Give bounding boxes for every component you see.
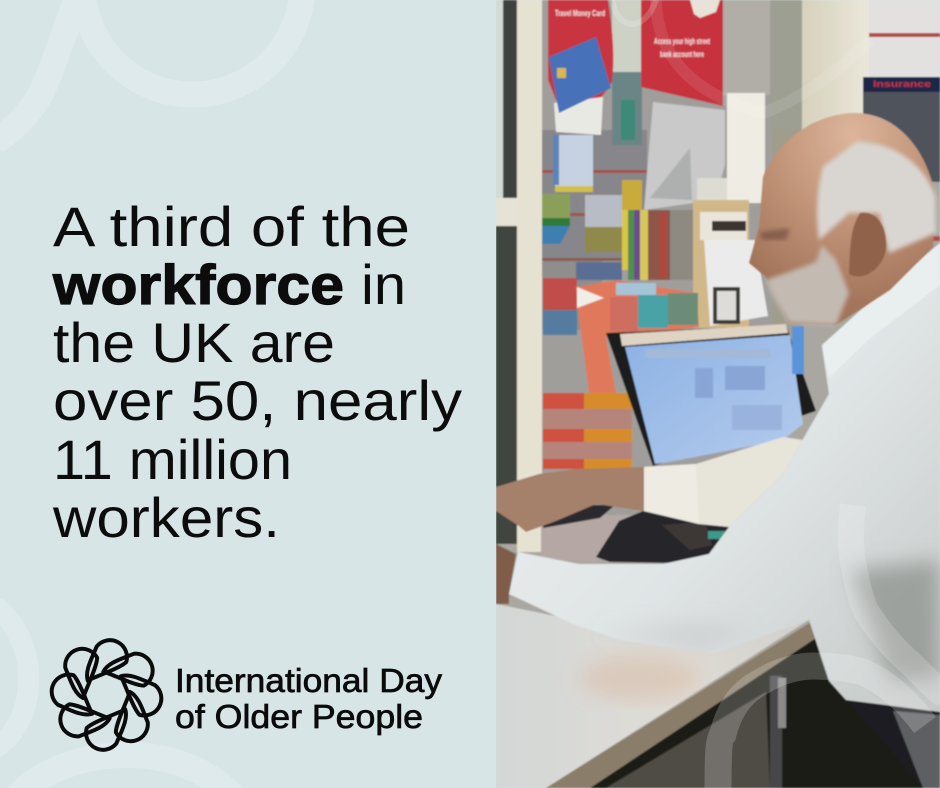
- shop display behind glass: [542, 0, 772, 530]
- ear: [849, 213, 886, 277]
- right wall, curtain and insurance poster: Insurance: [873, 79, 931, 89]
- man's near hand: [496, 544, 516, 604]
- red poster: bank account: [641, 0, 723, 106]
- man's head: [749, 113, 936, 325]
- counter front edge: [546, 622, 816, 788]
- packets and papers: [644, 93, 768, 328]
- headline text: over 50, nearly: [53, 369, 462, 432]
- man's far arm and sleeve: [643, 436, 803, 528]
- shirt shading: [600, 560, 940, 680]
- under-hand light area: [541, 515, 640, 562]
- red poster: travel money card: [548, 0, 613, 135]
- man's shirt body and near arm: [509, 243, 940, 712]
- icon: eight-petal flower: [52, 640, 161, 750]
- headline text: [52, 195, 462, 549]
- man's lower trousers: [850, 702, 940, 784]
- logo: International Day of Older People: [52, 640, 443, 750]
- headline text: workforce: [52, 253, 344, 316]
- eye shadow: [760, 228, 790, 240]
- headline text: in: [361, 253, 406, 316]
- photo: post office counter worker: [496, 0, 940, 788]
- headline text: 11 million: [53, 428, 292, 491]
- stickers and folders: [576, 262, 622, 280]
- warm light patch on counter: [580, 656, 700, 700]
- photo background wall: [497, 182, 940, 776]
- green and blue packs: [542, 194, 570, 220]
- logo wordmark: of Older People: [175, 698, 423, 735]
- till monitor: [606, 324, 816, 466]
- headline text: the UK are: [53, 311, 335, 374]
- man's far hand: [496, 467, 644, 532]
- panel: left background: [0, 0, 496, 788]
- rubber bands and foil: [585, 195, 623, 227]
- counter top: [496, 604, 812, 788]
- decorative swirl shapes on the left panel: [0, 0, 302, 788]
- headline text: A third of the: [53, 195, 410, 258]
- logo wordmark: [175, 662, 443, 735]
- coloured pencils: [622, 210, 628, 270]
- white hair patch: [817, 142, 936, 253]
- beard: [766, 245, 849, 325]
- pen packs: [555, 135, 593, 190]
- red poster: bank account: bank account here: [660, 50, 704, 59]
- right wall, curtain and insurance poster: [771, 0, 940, 339]
- cabinet under counter: [590, 638, 940, 788]
- window frame on the left edge: [496, 0, 542, 552]
- headline text: workers.: [52, 486, 280, 549]
- card reader and glasses: [543, 505, 730, 563]
- orange notebook and stacked stationery: [543, 280, 699, 469]
- red poster: bank account: Access your high street: [654, 37, 710, 46]
- red poster: travel money card: Travel Money Card: [555, 9, 605, 18]
- decorative translucent swirl on photo: [612, 0, 940, 788]
- logo wordmark: International Day: [175, 662, 443, 699]
- shirt collar: [822, 243, 940, 378]
